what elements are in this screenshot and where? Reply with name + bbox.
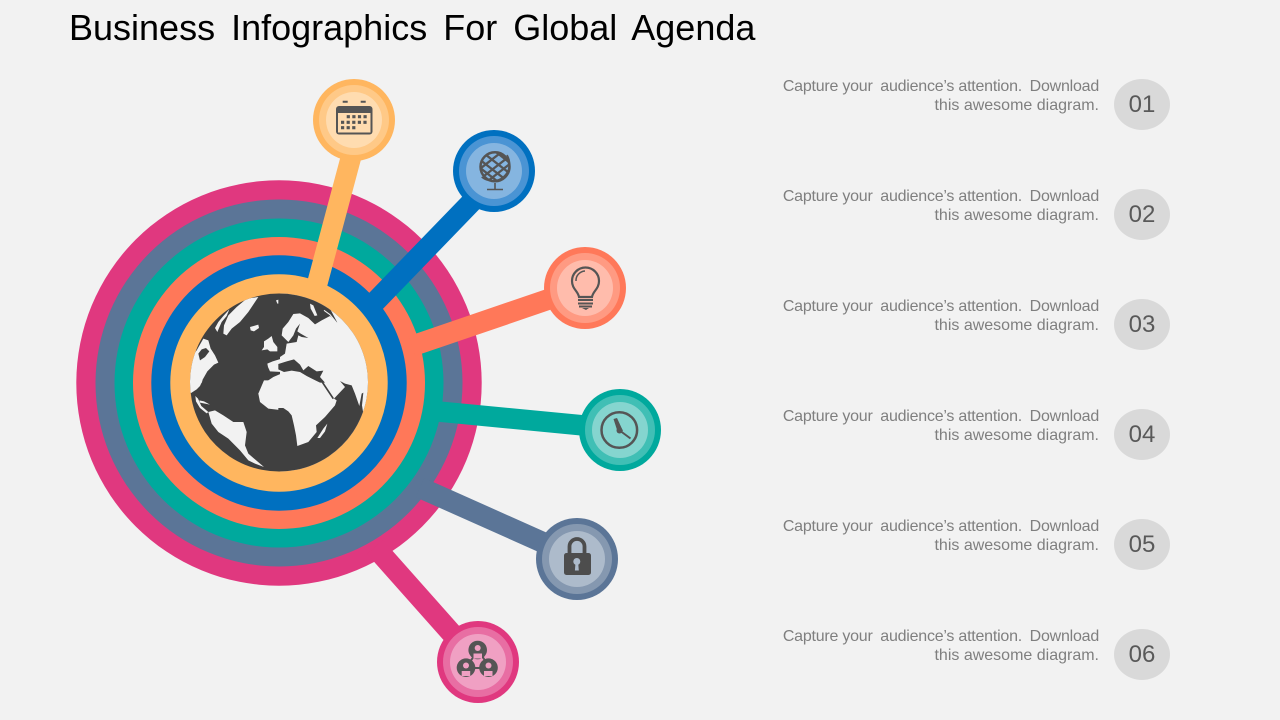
item 04 number badge: 04 (1129, 421, 1155, 448)
item 01 (783, 78, 1170, 130)
item 06 text: Capture your audience’s attention. Download (783, 628, 1099, 645)
connector 5: slate (420, 488, 565, 552)
connector 4: teal (430, 411, 610, 428)
item 02 (783, 188, 1170, 240)
item 04 number badge (1114, 409, 1170, 460)
node 6: team network icon (437, 621, 519, 703)
item 03 number badge (1114, 299, 1170, 350)
node 3: light bulb icon (544, 247, 626, 329)
item 02 text: Capture your audience’s attention. Download (783, 188, 1099, 205)
item 01 text: Capture your audience’s attention. Download (783, 78, 1099, 95)
globe (190, 294, 368, 472)
ring 6: pink (76, 180, 482, 586)
ring 2: blue (151, 255, 407, 511)
ring 1: orange (170, 274, 388, 492)
connector 6: pink (375, 547, 470, 654)
item 04 text (783, 408, 1099, 444)
item 05 text (783, 518, 1099, 554)
item 02 number badge: 02 (1129, 201, 1155, 228)
node 1: calendar icon (313, 79, 395, 161)
ring 5: slate (96, 200, 462, 566)
node 2: desk globe icon (453, 130, 535, 212)
ring 4: teal (114, 218, 444, 548)
item 04 text: this awesome diagram. (934, 427, 1099, 444)
item 05 number badge: 05 (1129, 531, 1155, 558)
item 05 text: Capture your audience’s attention. Download (783, 518, 1099, 535)
item 04 text: Capture your audience’s attention. Download (783, 408, 1099, 425)
item 06 number badge (1114, 629, 1170, 680)
item 01 number badge: 01 (1129, 91, 1155, 118)
item 03 number badge: 03 (1129, 311, 1155, 338)
node 5: padlock icon (536, 518, 618, 600)
item 05 text: this awesome diagram. (934, 537, 1099, 554)
item 05 (783, 518, 1170, 570)
item 06 (783, 628, 1170, 680)
item 03 text: Capture your audience’s attention. Download (783, 298, 1099, 315)
item 02 number badge (1114, 189, 1170, 240)
item 06 text: this awesome diagram. (934, 647, 1099, 664)
connector 1: orange (315, 131, 358, 292)
item 03 text: this awesome diagram. (934, 317, 1099, 334)
item 03 (783, 298, 1170, 350)
item 02 text: this awesome diagram. (934, 207, 1099, 224)
concentric ring diagram with globe and six icon nodes (76, 79, 661, 703)
node 4: clock icon (579, 389, 661, 471)
ring 3: coral (133, 237, 425, 529)
item 06 text (783, 628, 1099, 664)
item 01 number badge (1114, 79, 1170, 130)
title: Business Infographics For Global Agenda (69, 7, 755, 48)
item 02 text (783, 188, 1099, 224)
connector 3: coral (412, 292, 570, 346)
item 01 text (783, 78, 1099, 114)
item 04 (783, 408, 1170, 460)
item 05 number badge (1114, 519, 1170, 570)
item 01 text: this awesome diagram. (934, 97, 1099, 114)
item 06 number badge: 06 (1129, 641, 1155, 668)
connector 2: blue (373, 183, 490, 304)
item 03 text (783, 298, 1099, 334)
